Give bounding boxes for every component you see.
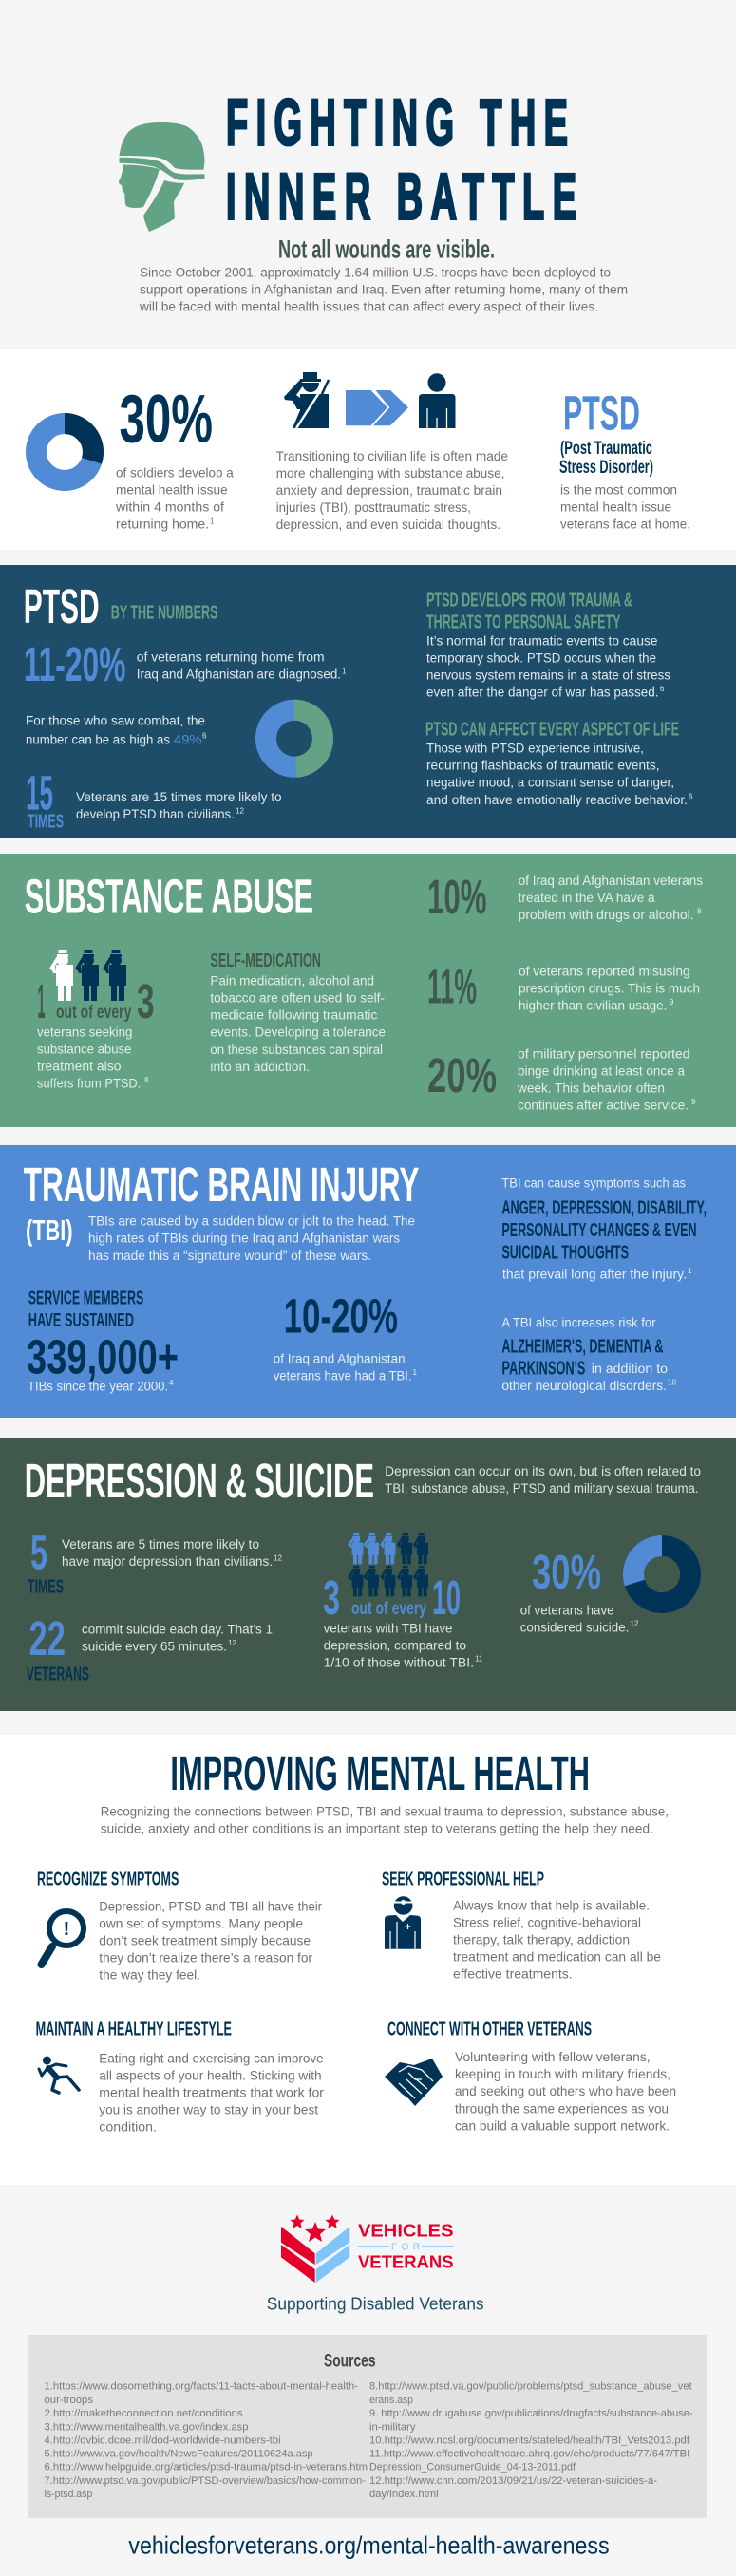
heading: post traumatic stress disorder — [559, 439, 653, 478]
text: fifteen times: 12 — [236, 807, 244, 815]
header — [0, 0, 736, 349]
text: traumatic events: It’s normal for traumatic events to cause — [426, 633, 657, 648]
text: experience: Those with PTSD experience intrusive, — [426, 742, 644, 756]
item: maintain a healthy lifestyle: MAINTAIN A HEALTHY LIFESTYLE — [36, 2019, 232, 2040]
text: 11 percent: of veterans reported misusing — [519, 964, 690, 978]
intro text — [139, 266, 628, 314]
text: considered suicide: of veterans have — [520, 1603, 614, 1617]
heading: trauma and threats — [426, 590, 632, 633]
text: fifteen times: Veterans are 15 times more likely to — [76, 790, 282, 804]
text: connect with veterans: can build a valuable support network. — [455, 2118, 670, 2133]
icon: transition arrows — [346, 390, 408, 425]
stat: 1 out of every 3: 3 — [137, 974, 155, 1028]
text: connect with veterans — [455, 2050, 676, 2133]
text: 5 times: 12 — [274, 1553, 282, 1563]
text: connect with veterans: and seeking out others who have been — [455, 2084, 676, 2098]
text: 5 times — [62, 1537, 282, 1569]
text: 5 times: Veterans are 5 times more likely to — [62, 1537, 259, 1551]
text: increased risk: 10 — [668, 1379, 676, 1386]
text: TBI description: high rates of TBIs during the Iraq and Afghanistan wars — [88, 1232, 400, 1246]
text: soldiers stat: within 4 months of — [115, 500, 224, 515]
text: 22 veterans: 12 — [228, 1639, 236, 1647]
heading: traumatic brain injury: TRAUMATIC BRAIN INJURY — [24, 1157, 419, 1212]
icon: soldier head with helmet — [119, 122, 205, 232]
text: 20 percent: of military personnel reported — [518, 1047, 690, 1062]
text: 11 percent: prescription drugs. This is much — [519, 981, 700, 995]
text: TBI depression: depression, compared to — [324, 1638, 466, 1652]
tagline: Supporting Disabled Veterans — [267, 2295, 484, 2314]
text: traumatic events: nervous system remains in a state of stress — [426, 668, 670, 682]
list: sources right column: 11.http://www.effectivehealthcare.ahrq.gov/ehc/products/77/647/TBI- — [369, 2449, 693, 2460]
text: 10-20 percent: 1 — [412, 1368, 418, 1377]
text: recognize symptoms: own set of symptoms. Many people — [99, 1917, 303, 1931]
text: 22 veterans: commit suicide each day. That’s 1 — [82, 1623, 273, 1637]
item: maintain a healthy lifestyle — [36, 2019, 325, 2134]
icon: civilian person — [419, 373, 456, 428]
logo: vehicles for veterans — [281, 2214, 454, 2283]
text: 20 percent: continues after active service. — [518, 1099, 689, 1113]
heading: service members — [28, 1288, 143, 1331]
text: combat number: 49% — [174, 732, 201, 746]
chart: 49 percent donut — [266, 710, 323, 767]
stat: 1 out of every 3 — [38, 974, 155, 1028]
text: recognize symptoms — [99, 1900, 322, 1983]
list: sources left column: 1.https://www.dosomething.org/facts/11-facts-about-mental-health- — [44, 2381, 358, 2393]
stat: 3 out of every 10 — [323, 1570, 461, 1625]
heading: post traumatic stress disorder: Stress Disorder) — [559, 458, 653, 478]
text: combat number: For those who saw combat, the — [26, 713, 205, 727]
list: sources right column: Depression_ConsumerGuide_04-13-2011.pdf — [369, 2462, 576, 2473]
text: soldiers stat: of soldiers develop a — [116, 466, 234, 480]
heading: TBI: (TBI) — [26, 1213, 73, 1247]
footer url: vehiclesforveterans.org/mental-health-awareness — [128, 2530, 610, 2559]
text: increased risk: PARKINSON'S — [501, 1358, 585, 1380]
chart: 30 percent suicide donut — [633, 1546, 690, 1603]
text: transitioning: Transitioning to civilian life is often made — [276, 449, 508, 463]
stat: 5 times: 5 — [30, 1526, 47, 1580]
text: soldiers stat — [115, 466, 234, 532]
text: depression intro — [385, 1464, 701, 1495]
text: 11 percent: 9 — [670, 998, 674, 1006]
stat: 3 out of every 10: 3 — [323, 1570, 340, 1625]
icon: saluting soldier — [284, 372, 329, 428]
icon: handshake — [385, 2059, 443, 2106]
text: intro: Recognizing the connections between PTSD, TBI and sexual trauma to depression, substance abuse, — [101, 1805, 669, 1819]
stat: 5 times: TIMES — [28, 1575, 64, 1597]
text: healthy lifestyle: mental health treatments that work for — [99, 2085, 325, 2099]
text: seek professional help — [453, 1898, 661, 1981]
text: recognize symptoms: Depression, PTSD and TBI all have their — [99, 1900, 322, 1914]
text: soldiers stat: returning home. — [116, 517, 209, 532]
panel: PTSD by the numbers — [0, 565, 736, 838]
text: TBIs since 2000: TIBs since the year 2000. — [28, 1379, 168, 1393]
text: most common issue: mental health issue — [560, 500, 671, 515]
text: transitioning — [276, 449, 508, 532]
text: most common issue: veterans face at home. — [560, 517, 690, 532]
text: soldiers stat: 1 — [210, 517, 215, 526]
text: experience: and often have emotionally reactive behavior. — [426, 793, 688, 807]
stat: 20 percent: 20% — [427, 1048, 497, 1102]
heading: PTSD: PTSD — [563, 386, 640, 441]
text: traumatic events: temporary shock. PTSD occurs when the — [426, 650, 656, 665]
stat: 30 percent: 30% — [532, 1545, 601, 1599]
text: self-medication: medicate following traumatic — [210, 1008, 378, 1023]
text: combat number: 6 — [202, 731, 207, 741]
text: soldiers stat: mental health issue — [116, 483, 228, 498]
stat: 1 out of every 3: 1 — [38, 974, 46, 1028]
text: connect with veterans: through the same experiences as you — [455, 2101, 669, 2115]
stat: 15 times: TIMES — [28, 811, 64, 833]
text: increased risk — [501, 1316, 676, 1393]
stat: 15 times: 15 — [26, 766, 53, 820]
heading: by the numbers: BY THE NUMBERS — [111, 602, 217, 624]
text: symptoms: SUICIDAL THOUGHTS — [501, 1241, 629, 1263]
text: considered suicide: 12 — [631, 1620, 639, 1627]
list: sources left column: 5.http://www.va.gov/health/NewsFeatures/20110624a.asp — [44, 2449, 313, 2460]
text: recognize symptoms: don’t seek treatment simply because — [99, 1934, 311, 1948]
text: depression intro: TBI, substance abuse, PTSD and military sexual trauma. — [385, 1481, 699, 1495]
text: transitioning: anxiety and depression, traumatic brain — [276, 483, 502, 498]
text: symptoms: TBI can cause symptoms such as — [501, 1175, 686, 1190]
heading: PTSD: PTSD — [24, 579, 100, 633]
stat: 5 times — [28, 1526, 64, 1597]
text: veterans diagnosed: Iraq and Afghanistan are diagnosed. — [137, 668, 341, 682]
panel: improving mental health — [0, 1735, 736, 2185]
text: self-medication — [210, 974, 386, 1074]
text: increased risk: A TBI also increases risk for — [501, 1316, 656, 1330]
list: sources left column: 7.http://www.ptsd.va.gov/public/PTSD-overview/basics/how-common- — [44, 2475, 366, 2487]
icon: runner — [39, 2057, 79, 2093]
text: transitioning: more challenging with substance abuse, — [276, 466, 504, 480]
text: experience: negative mood, a constant sense of danger, — [426, 776, 674, 790]
text: depression intro: Depression can occur on its own, but is often related to — [385, 1464, 701, 1478]
text: healthy lifestyle: all aspects of your health. Sticking with — [99, 2068, 322, 2082]
list: sources right column: erans.asp — [369, 2395, 413, 2406]
panel: depression and suicide — [0, 1438, 736, 1711]
list: sources right column: 10.http://www.ncsl.org/documents/statefed/health/TBI_Vets2013.pdf — [369, 2435, 690, 2446]
item: connect with other veterans: CONNECT WITH OTHER VETERANS — [387, 2019, 592, 2040]
title — [226, 86, 576, 233]
stat: 15 times — [26, 766, 64, 833]
text: veterans diagnosed: of veterans returning home from — [137, 650, 325, 665]
panel: sources — [28, 2335, 707, 2518]
panel: traumatic brain injury — [0, 1145, 736, 1418]
stat: 10-20 percent: 10-20% — [284, 1289, 398, 1344]
text: TBI depression: veterans with TBI have — [324, 1621, 452, 1635]
list: sources left column: 2.http://maketheconnection.net/conditions — [44, 2408, 243, 2419]
heading: self-medication: SELF-MEDICATION — [210, 950, 321, 971]
text: seeking treatment: veterans seeking — [37, 1025, 132, 1040]
list: sources left column — [44, 2381, 368, 2500]
stat: 3 out of every 10: 10 — [432, 1570, 461, 1625]
text: self-medication: into an addiction. — [210, 1060, 310, 1074]
stat: 22 veterans — [27, 1611, 89, 1684]
stat: 339,000+: 339,000+ — [27, 1330, 179, 1384]
text: considered suicide — [520, 1603, 639, 1634]
heading: depression and suicide: DEPRESSION & SUICIDE — [25, 1454, 374, 1508]
text: TBIs since 2000: 4 — [169, 1379, 174, 1387]
icon: magnifying glass — [42, 1911, 84, 1965]
text: seeking treatment: 8 — [144, 1076, 149, 1084]
text: combat number — [26, 713, 207, 746]
text: TBI depression — [324, 1621, 483, 1669]
text: 20 percent: binge drinking at least once a — [518, 1064, 685, 1079]
item: recognize symptoms: RECOGNIZE SYMPTOMS — [37, 1869, 179, 1890]
text: 22 veterans — [82, 1623, 273, 1654]
intro text: Since October 2001, approximately 1.64 million U.S. troops have been deployed to — [140, 266, 611, 280]
text: 20 percent: week. This behavior often — [517, 1081, 665, 1096]
text: 20 percent: 9 — [691, 1098, 696, 1106]
text: 10 percent — [519, 874, 703, 922]
text: TBI depression: 1/10 of those without TBI. — [324, 1655, 474, 1669]
text: experience — [426, 742, 693, 807]
text: transitioning: depression, and even suicidal thoughts. — [276, 517, 500, 532]
text: fifteen times — [76, 790, 282, 821]
text: TBI description — [88, 1214, 415, 1263]
icon: doctor — [385, 1896, 421, 1949]
stat: 30 percent: 30% — [120, 382, 213, 457]
text: experience: recurring flashbacks of traumatic events, — [426, 759, 659, 773]
logo: vehicles for veterans: FOR — [391, 2242, 420, 2252]
text: intro: suicide, anxiety and other conditions is an important step to veterans getting the help they need. — [101, 1822, 653, 1836]
list: sources right column: day/index.html — [369, 2489, 439, 2500]
icon: magnifying glass: ! — [64, 1919, 69, 1940]
title: FIGHTING THE — [226, 86, 568, 159]
text: fifteen times: develop PTSD than civilians. — [76, 807, 235, 821]
list: sources left column: 4.http://dvbic.dcoe.mil/dod-worldwide-numbers-tbi — [44, 2435, 281, 2446]
text: 10 percent: treated in the VA have a — [519, 891, 655, 905]
panel: substance abuse — [0, 854, 736, 1127]
item: seek professional help — [382, 1869, 661, 1981]
heading: service members: SERVICE MEMBERS — [28, 1288, 143, 1309]
item: connect with other veterans — [385, 2019, 676, 2133]
text: 5 times: have major depression than civilians. — [62, 1554, 273, 1569]
text: connect with veterans: keeping in touch with military friends, — [455, 2067, 670, 2081]
text: combat number: number can be as high as — [26, 732, 170, 746]
text: increased risk: in addition to — [592, 1362, 668, 1376]
text: experience: 6 — [689, 792, 693, 801]
text: traumatic events: 6 — [660, 685, 665, 693]
text: 10-20 percent: of Iraq and Afghanistan — [274, 1352, 406, 1366]
text: 10-20 percent — [274, 1352, 418, 1383]
item: seek professional help: SEEK PROFESSIONAL HELP — [382, 1869, 544, 1890]
list: sources right column: 12.http://www.cnn.com/2013/09/21/us/22-veteran-suicides-a- — [369, 2475, 657, 2487]
list: sources left column: 6.http://www.helpguide.org/articles/ptsd-trauma/ptsd-in-veterans.htm — [44, 2462, 368, 2473]
text: intro — [101, 1805, 669, 1836]
text: 10 percent: of Iraq and Afghanistan veterans — [519, 874, 703, 888]
heading: sources: Sources — [324, 2352, 376, 2372]
text: healthy lifestyle: condition. — [99, 2120, 157, 2134]
text: symptoms: that prevail long after the injury. — [502, 1268, 687, 1282]
text: 11 percent — [519, 964, 700, 1012]
chart: 30 percent donut — [36, 423, 93, 480]
text: 10-20 percent: veterans have had a TBI. — [274, 1369, 412, 1383]
text: self-medication: on these substances can spiral — [210, 1043, 383, 1057]
text: recognize symptoms: they don’t realize there’s a reason for — [99, 1951, 312, 1965]
text: seeking treatment: suffers from PTSD. — [37, 1077, 141, 1091]
list: sources right column: 9. http://www.drugabuse.gov/publications/drugfacts/substance-abuse- — [369, 2408, 693, 2419]
intro text: will be faced with mental health issues that can affect every aspect of their lives. — [139, 300, 598, 314]
text: TBI description: TBIs are caused by a sudden blow or jolt to the head. The — [88, 1214, 415, 1229]
panel: overview — [0, 349, 736, 550]
text: 10 percent: 8 — [697, 908, 702, 915]
text: symptoms — [501, 1175, 707, 1282]
logo: vehicles for veterans: VETERANS — [358, 2252, 454, 2271]
stat: 1 out of every 3: out of every — [56, 1003, 132, 1023]
text: seeking treatment: treatment also — [37, 1060, 122, 1074]
stat: 22 veterans: 22 — [29, 1611, 66, 1665]
heading: substance abuse: SUBSTANCE ABUSE — [25, 870, 313, 924]
text: seeking treatment — [37, 1025, 149, 1091]
list: sources right column: in-military — [369, 2421, 416, 2433]
text: traumatic events — [426, 633, 670, 699]
text: seek professional help: Always know that help is available. — [453, 1898, 650, 1912]
heading: post traumatic stress disorder: (Post Traumatic — [560, 439, 652, 459]
text: healthy lifestyle: you is another way to stay in your best — [99, 2103, 318, 2117]
text: recognize symptoms: the way they feel. — [99, 1968, 200, 1983]
text: seek professional help: treatment and medication can all be — [453, 1949, 661, 1964]
text: 20 percent — [517, 1047, 696, 1113]
text: seek professional help: therapy, talk therapy, addiction — [453, 1932, 630, 1946]
stat: 11-20 percent: 11-20% — [24, 637, 126, 691]
logo: vehicles for veterans: VEHICLES — [358, 2222, 454, 2241]
text: self-medication: events. Developing a tolerance — [210, 1025, 386, 1040]
text: most common issue: is the most common — [560, 483, 677, 498]
text: TBI description: has made this a “signature wound” of these wars. — [88, 1249, 371, 1263]
text: TBI depression: 11 — [475, 1654, 483, 1664]
title: INNER BATTLE — [226, 160, 576, 233]
text: considered suicide: considered suicide. — [520, 1620, 629, 1634]
item: recognize symptoms — [37, 1869, 322, 1983]
text: veterans diagnosed: 1 — [342, 667, 347, 676]
text: 22 veterans: suicide every 65 minutes. — [82, 1640, 227, 1654]
heading: trauma and threats: THREATS TO PERSONAL SAFETY — [426, 611, 621, 633]
text: seeking treatment: substance abuse — [37, 1043, 131, 1057]
text: connect with veterans: Volunteering with fellow veterans, — [455, 2050, 651, 2064]
stat: 11 percent: 11% — [427, 960, 477, 1014]
text: healthy lifestyle: Eating right and exercising can improve — [99, 2051, 324, 2065]
icon: 3 of 10 soldiers — [348, 1533, 428, 1596]
list: sources left column: is-ptsd.asp — [44, 2489, 92, 2500]
stat: 10 percent: 10% — [427, 870, 487, 924]
text: healthy lifestyle — [99, 2051, 325, 2134]
text: seek professional help: Stress relief, cognitive-behavioral — [453, 1915, 641, 1929]
list: sources right column: 8.http://www.ptsd.va.gov/public/problems/ptsd_substance_abuse_vet — [369, 2381, 692, 2393]
text: transitioning: injuries (TBI), posttraumatic stress, — [276, 500, 471, 515]
text: traumatic events: even after the danger of war has passed. — [426, 685, 659, 699]
text: increased risk: other neurological disorders. — [501, 1379, 667, 1393]
icon: 1 of 3 soldiers — [49, 950, 126, 1001]
list: sources left column: our-troops — [44, 2395, 94, 2406]
text: most common issue — [560, 483, 690, 532]
list: sources left column: 3.http://www.mentalhealth.va.gov/index.asp — [44, 2421, 249, 2433]
text: seek professional help: effective treatments. — [453, 1966, 573, 1981]
stat: 3 out of every 10: out of every — [351, 1599, 426, 1619]
text: symptoms: 1 — [688, 1267, 692, 1275]
text: 11 percent: higher than civilian usage. — [519, 998, 667, 1012]
text: self-medication: Pain medication, alcohol and — [210, 974, 374, 988]
text: 10 percent: problem with drugs or alcohol. — [519, 908, 694, 922]
text: veterans diagnosed — [137, 650, 347, 682]
list: sources right column — [369, 2381, 693, 2500]
text: self-medication: tobacco are often used to self- — [210, 991, 385, 1006]
stat: 22 veterans: VETERANS — [27, 1663, 89, 1684]
subtitle: Not all wounds are visible. — [278, 235, 495, 264]
intro text: support operations in Afghanistan and Iraq. Even after returning home, many of them — [140, 283, 628, 297]
heading: service members: HAVE SUSTAINED — [28, 1309, 134, 1331]
